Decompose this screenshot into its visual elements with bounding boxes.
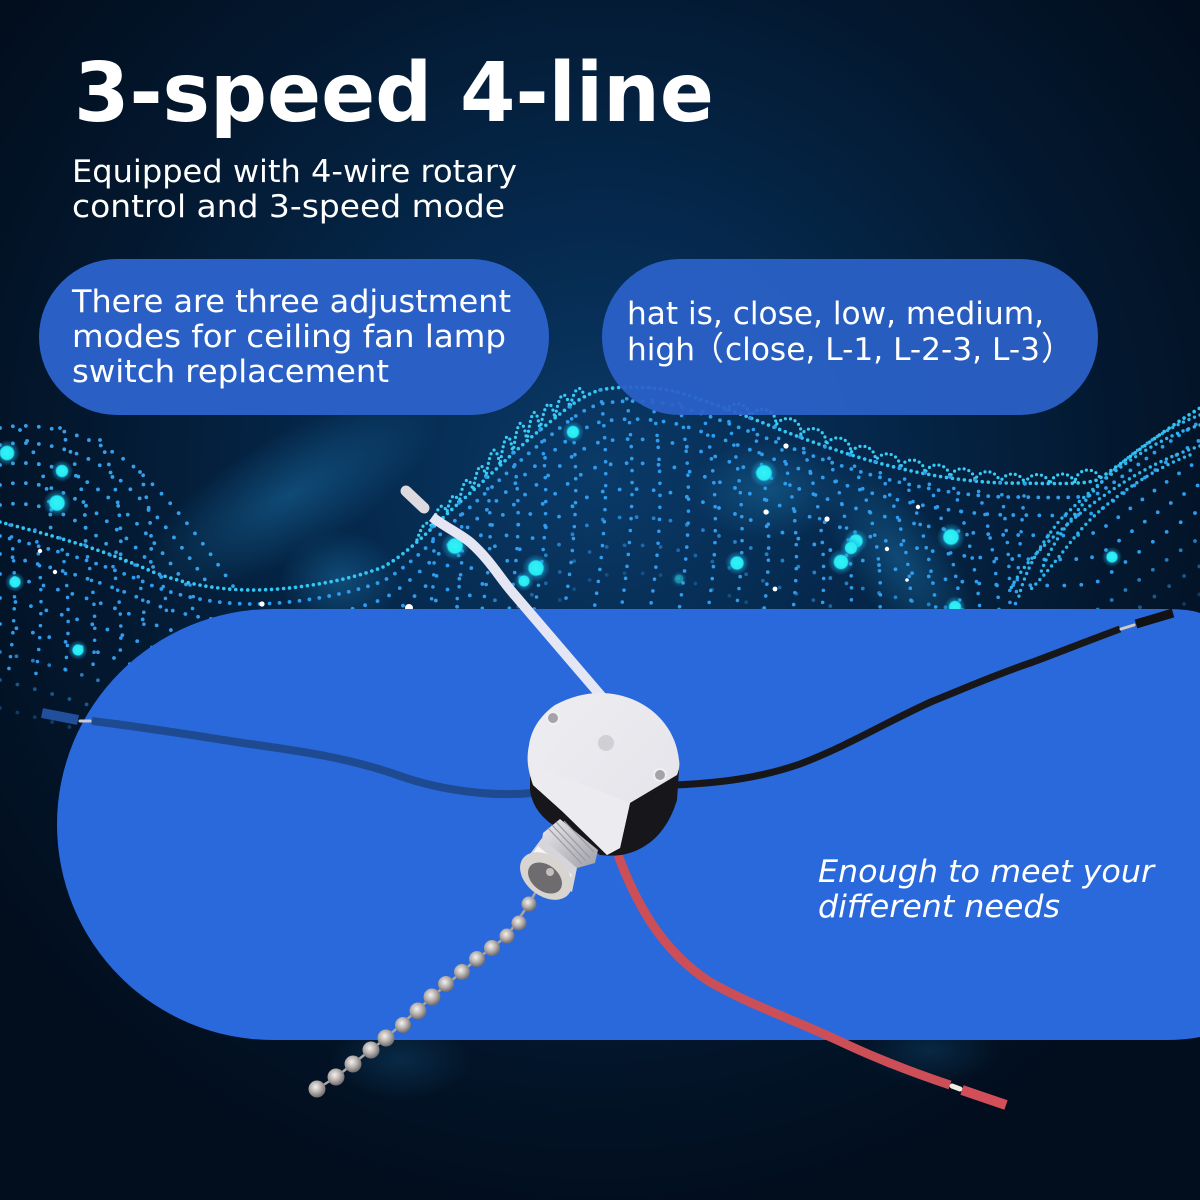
callout text: Enough to meet your	[818, 854, 1156, 890]
wire: blue	[42, 713, 532, 794]
callout text	[818, 854, 1156, 925]
knurled collar	[542, 819, 598, 868]
intro text: Equipped with 4-wire rotary	[72, 154, 517, 190]
panel: adjustment modes	[39, 259, 549, 415]
bead chain	[308, 893, 536, 1098]
panel: adjustment modes: There are three adjustment	[71, 284, 511, 320]
crest line	[0, 387, 1200, 590]
glowing particles	[0, 421, 1122, 660]
switch body	[511, 693, 679, 910]
center hole	[598, 735, 614, 751]
left dome of dots	[0, 426, 237, 592]
black base	[530, 770, 679, 856]
rows beneath crest	[0, 401, 1200, 776]
panel: speed settings: close, L-1, L-2-3, L-3	[725, 332, 1040, 368]
scalloped crest	[417, 388, 1100, 540]
dotted particle wave	[0, 387, 1200, 776]
panel: speed settings: high	[627, 332, 695, 368]
intro text	[72, 154, 517, 225]
screws	[547, 712, 559, 724]
hanging dot columns	[8, 387, 1025, 680]
right braided band	[1010, 415, 1200, 600]
panel: adjustment modes: modes for ceiling fan lamp	[72, 319, 506, 355]
panel: large blue background pill	[57, 609, 1200, 1040]
white housing	[528, 693, 679, 855]
title: 3-speed 4-line	[74, 46, 714, 141]
background glow	[113, 358, 1010, 1100]
intro text: control and 3-speed mode	[72, 189, 505, 225]
wire: black	[675, 613, 1173, 785]
panel: adjustment modes: switch replacement	[72, 354, 389, 390]
chrome nose	[511, 838, 581, 910]
product: pull chain switch	[42, 491, 1173, 1105]
panel: speed settings: ）	[1041, 329, 1074, 368]
callout text: different needs	[818, 889, 1060, 925]
wire: red	[618, 855, 1006, 1105]
wire: white	[406, 491, 602, 697]
panel: speed settings: hat is, close, low, medium,	[627, 296, 1044, 332]
panel: speed settings	[602, 259, 1098, 415]
panel: speed settings: （	[691, 329, 724, 368]
